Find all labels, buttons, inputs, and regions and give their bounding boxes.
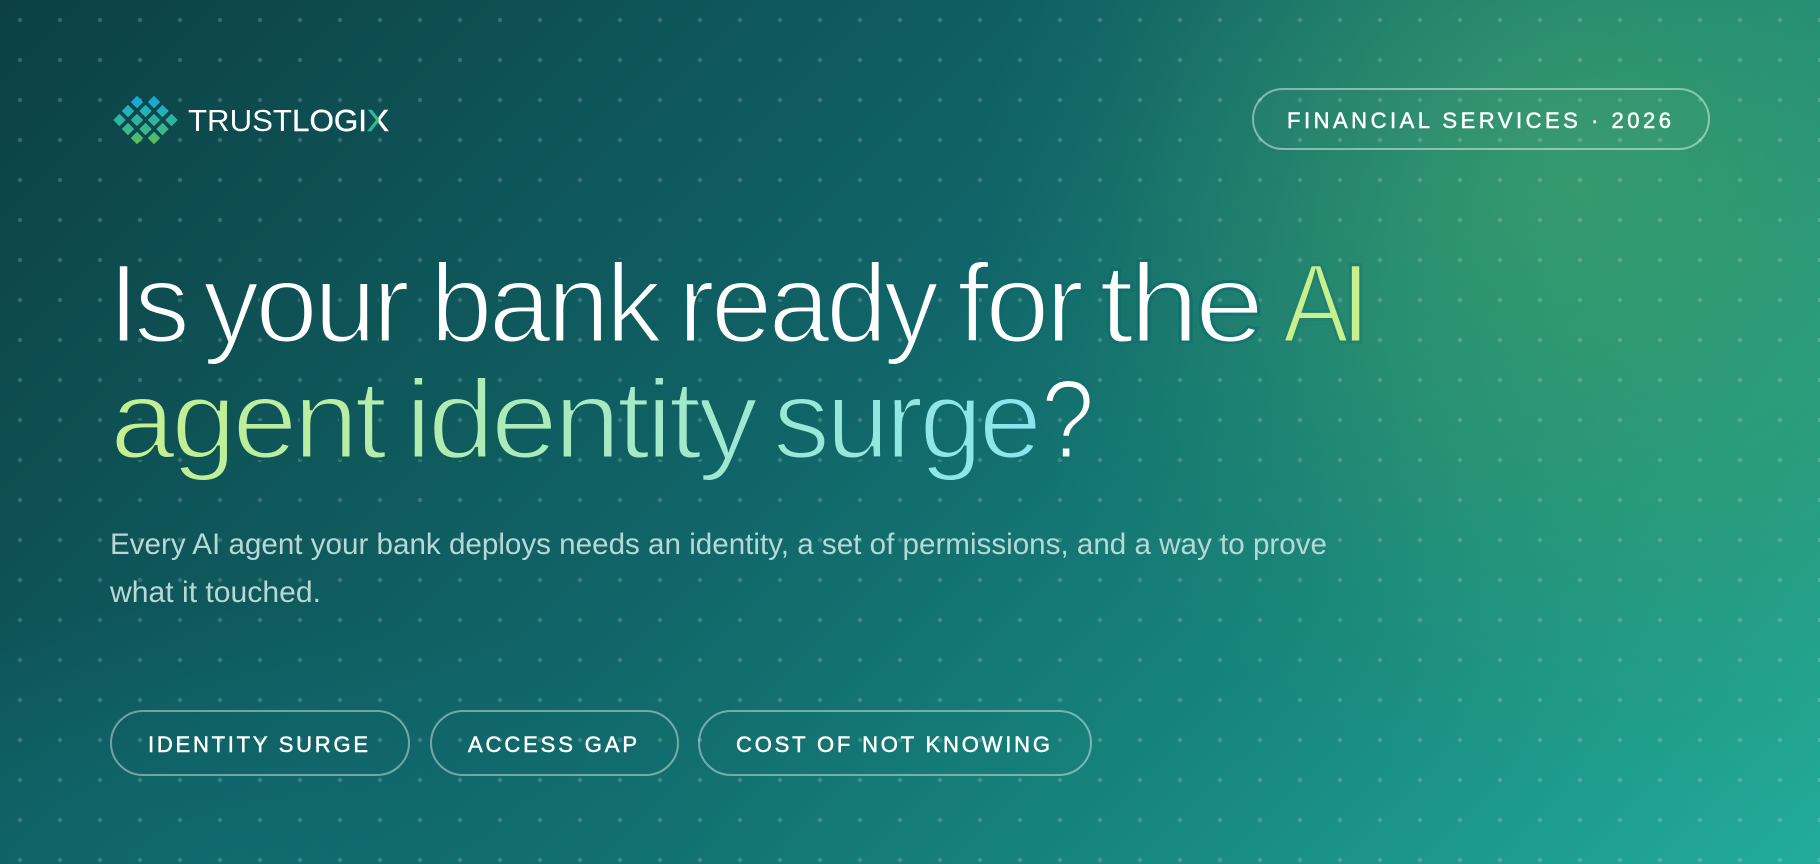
subtitle bbox=[109, 528, 1327, 609]
title line 1: ready bbox=[678, 241, 939, 366]
wordmark bbox=[188, 103, 389, 138]
wordmark: TRUST bbox=[188, 103, 292, 138]
title line 2: agent bbox=[110, 357, 387, 482]
title line 1: your bbox=[203, 241, 409, 366]
chips bbox=[111, 711, 1091, 775]
logo: Trustlogix bbox=[113, 96, 389, 144]
subtitle: what it touched. bbox=[109, 576, 321, 609]
title line 1: the bbox=[1099, 241, 1260, 366]
title line 2 bbox=[110, 357, 1038, 482]
title accent: AI: I bbox=[1340, 241, 1367, 366]
title line 1: s bbox=[134, 241, 186, 366]
icon: diamond grid mark bbox=[113, 96, 178, 144]
title line 2: identity bbox=[405, 357, 758, 482]
wordmark: LOGI bbox=[292, 103, 367, 138]
chip: identity surge: IDENTITY SURGE bbox=[148, 732, 368, 757]
title line 1: bank bbox=[430, 241, 663, 366]
title line 1 bbox=[108, 241, 1260, 366]
title question mark: ? bbox=[1041, 357, 1092, 482]
title line 2: surge bbox=[773, 357, 1038, 482]
title line 1: I bbox=[108, 241, 135, 366]
title line 1: for bbox=[957, 241, 1083, 366]
subtitle: Every AI agent your bank deploys needs an identity, a set of permissions, and a way to prove bbox=[110, 528, 1327, 561]
chip: cost of not knowing bbox=[699, 711, 1091, 775]
badge: financial services 2026: FINANCIAL SERVICES · 2026 bbox=[1287, 108, 1671, 133]
badge: financial services 2026 bbox=[1253, 89, 1709, 149]
chip: identity surge bbox=[111, 711, 409, 775]
chip: cost of not knowing: COST OF NOT KNOWING bbox=[736, 732, 1050, 757]
chip: access gap: ACCESS GAP bbox=[468, 732, 637, 757]
chip: access gap bbox=[431, 711, 678, 775]
wordmark: X bbox=[367, 103, 389, 138]
title bbox=[108, 241, 1367, 482]
title accent: AI: A bbox=[1283, 241, 1349, 366]
